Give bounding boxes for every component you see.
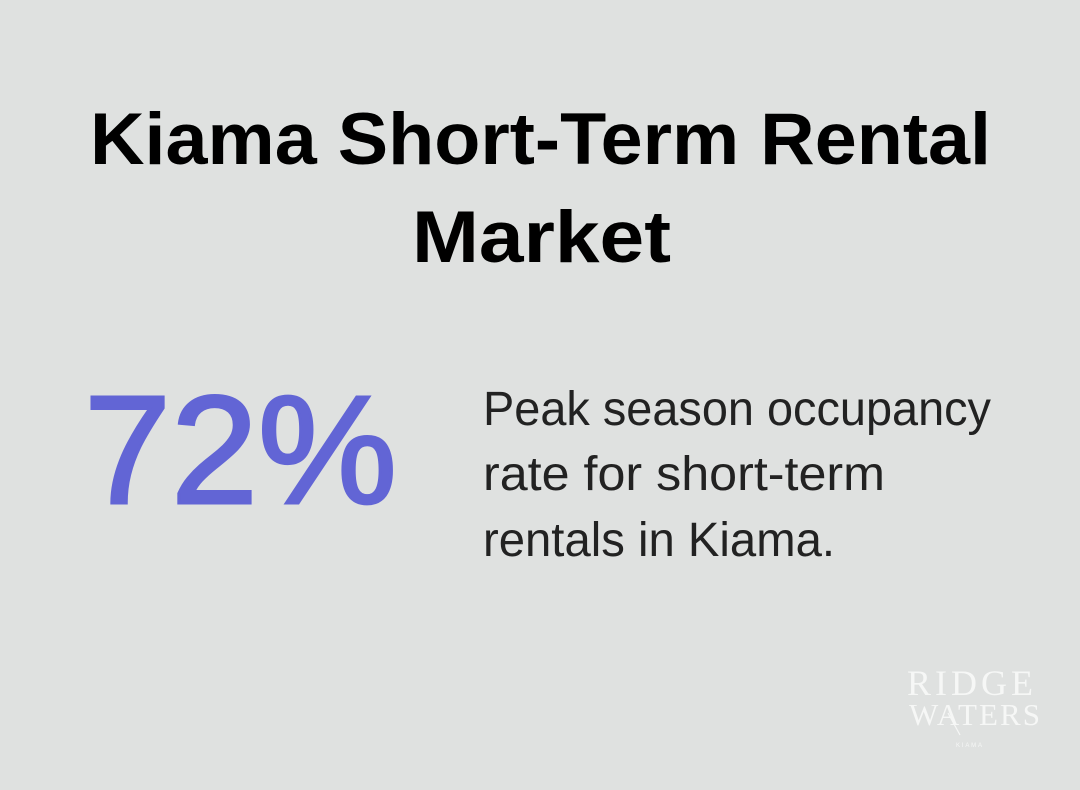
logo: Ridge Waters Kiama: RIDGE — [907, 663, 1033, 703]
title: Kiama Short-Term Rental — [90, 99, 991, 180]
title — [90, 99, 991, 278]
logo: Ridge Waters Kiama — [907, 663, 1040, 749]
description text: rentals in Kiama. — [483, 514, 835, 567]
description text — [483, 383, 991, 567]
description text: Peak season occupancy — [483, 383, 991, 436]
logo: Ridge Waters Kiama: KIAMA — [956, 743, 982, 749]
title: Market — [412, 197, 671, 278]
logo: Ridge Waters Kiama: WATERS — [909, 697, 1040, 732]
description text: rate for short-term — [483, 448, 885, 501]
big statistic: 72%: 72% — [84, 364, 397, 536]
